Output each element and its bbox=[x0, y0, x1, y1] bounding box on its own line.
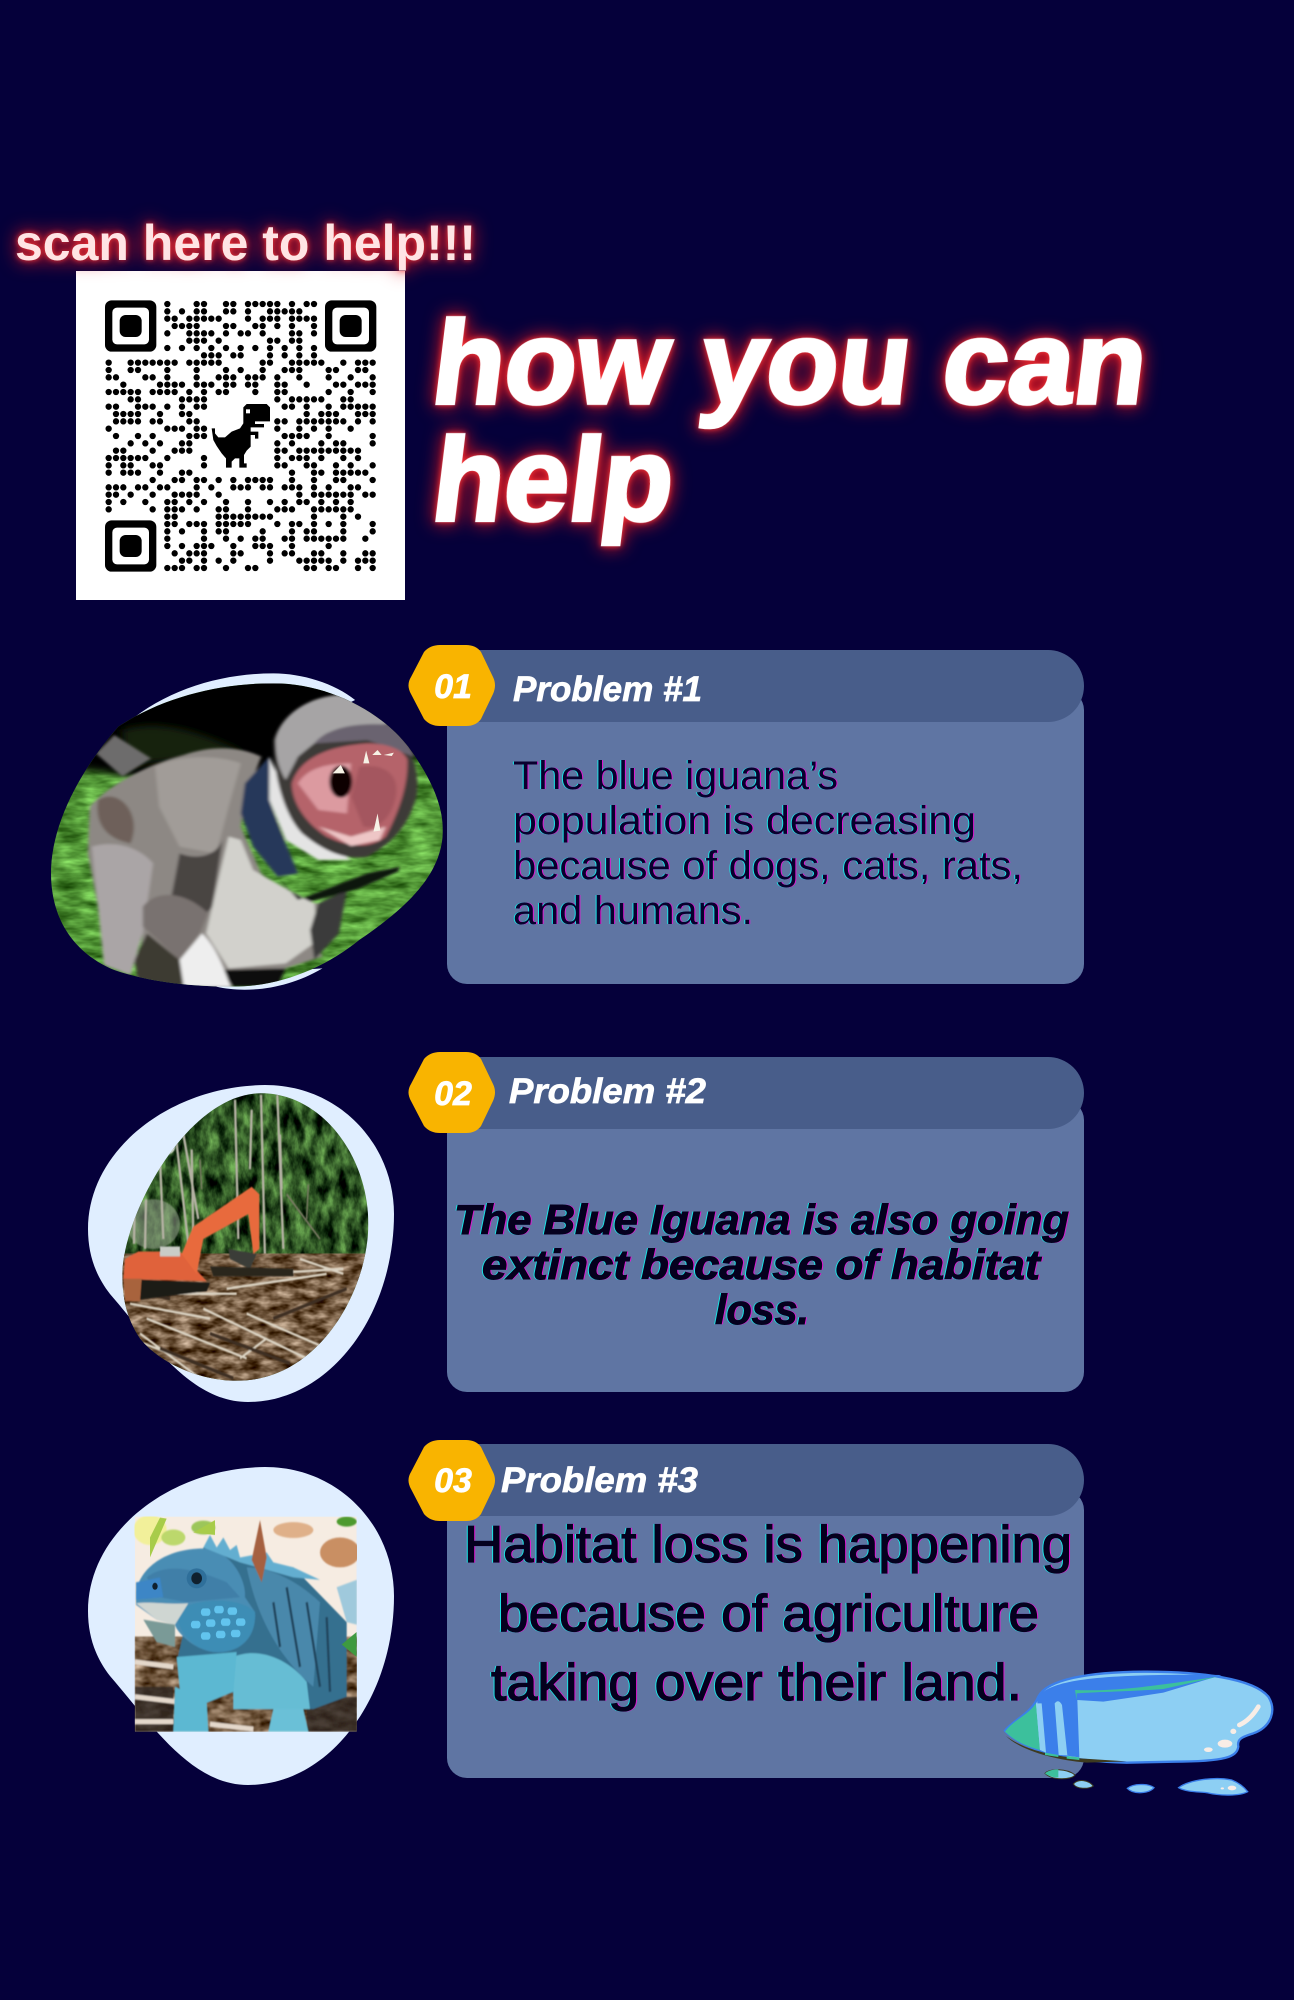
text: problem 3 body: Habitat loss is happening bbox=[464, 1516, 1072, 1574]
icon: melting puddle bbox=[1005, 1672, 1272, 1795]
blob: iguana backdrop bbox=[88, 1467, 394, 1785]
QR finder top left bbox=[105, 300, 156, 352]
photo: dog in blob bbox=[51, 673, 443, 990]
caption: scan here to help: scan here to help!!! bbox=[15, 215, 476, 271]
text: problem 1 body: and humans. bbox=[513, 889, 753, 933]
heading: problem 1: Problem #1 bbox=[513, 670, 702, 709]
heading: problem 2: Problem #2 bbox=[509, 1072, 707, 1111]
badge 03: 03 bbox=[434, 1462, 472, 1500]
text: problem 1 body: The blue iguana’s bbox=[513, 754, 838, 798]
badge 03 bbox=[408, 1440, 495, 1521]
text: problem 3 body: because of agriculture bbox=[498, 1585, 1039, 1643]
QR finder bottom left bbox=[105, 520, 156, 572]
text: problem 1 body: because of dogs, cats, rats, bbox=[513, 844, 1023, 888]
photo: excavator clearing forest bbox=[120, 1090, 370, 1383]
title bbox=[426, 297, 1155, 546]
photo: blue iguana bbox=[133, 1515, 360, 1732]
text: problem 2 body bbox=[454, 1196, 1069, 1333]
panel: problem 3 bbox=[408, 1440, 1084, 1778]
text: problem 3 body: taking over their land. bbox=[491, 1654, 1022, 1712]
QR code bbox=[76, 271, 405, 600]
heading: problem 3: Problem #3 bbox=[501, 1461, 699, 1500]
title: how you can bbox=[426, 297, 1155, 429]
badge 01: 01 bbox=[434, 668, 472, 706]
badge 01 bbox=[408, 645, 495, 726]
text: problem 2 body: loss. bbox=[715, 1286, 809, 1333]
text: problem 1 body bbox=[513, 754, 1023, 933]
panel: problem 2 bbox=[408, 1052, 1084, 1392]
blob: excavator backdrop bbox=[88, 1085, 394, 1402]
text: problem 3 body bbox=[464, 1516, 1072, 1712]
text: problem 2 body: The Blue Iguana is also going bbox=[454, 1196, 1069, 1243]
badge 02 bbox=[408, 1052, 495, 1133]
title: help bbox=[426, 414, 682, 546]
badge 02: 02 bbox=[434, 1075, 472, 1113]
panel: problem 1 bbox=[408, 645, 1084, 984]
text: problem 1 body: population is decreasing bbox=[513, 799, 976, 843]
text: problem 2 body: extinct because of habitat bbox=[482, 1241, 1042, 1288]
QR finder top right bbox=[325, 300, 376, 352]
icon: dinosaur bbox=[212, 404, 270, 468]
QR dots bbox=[109, 304, 373, 568]
